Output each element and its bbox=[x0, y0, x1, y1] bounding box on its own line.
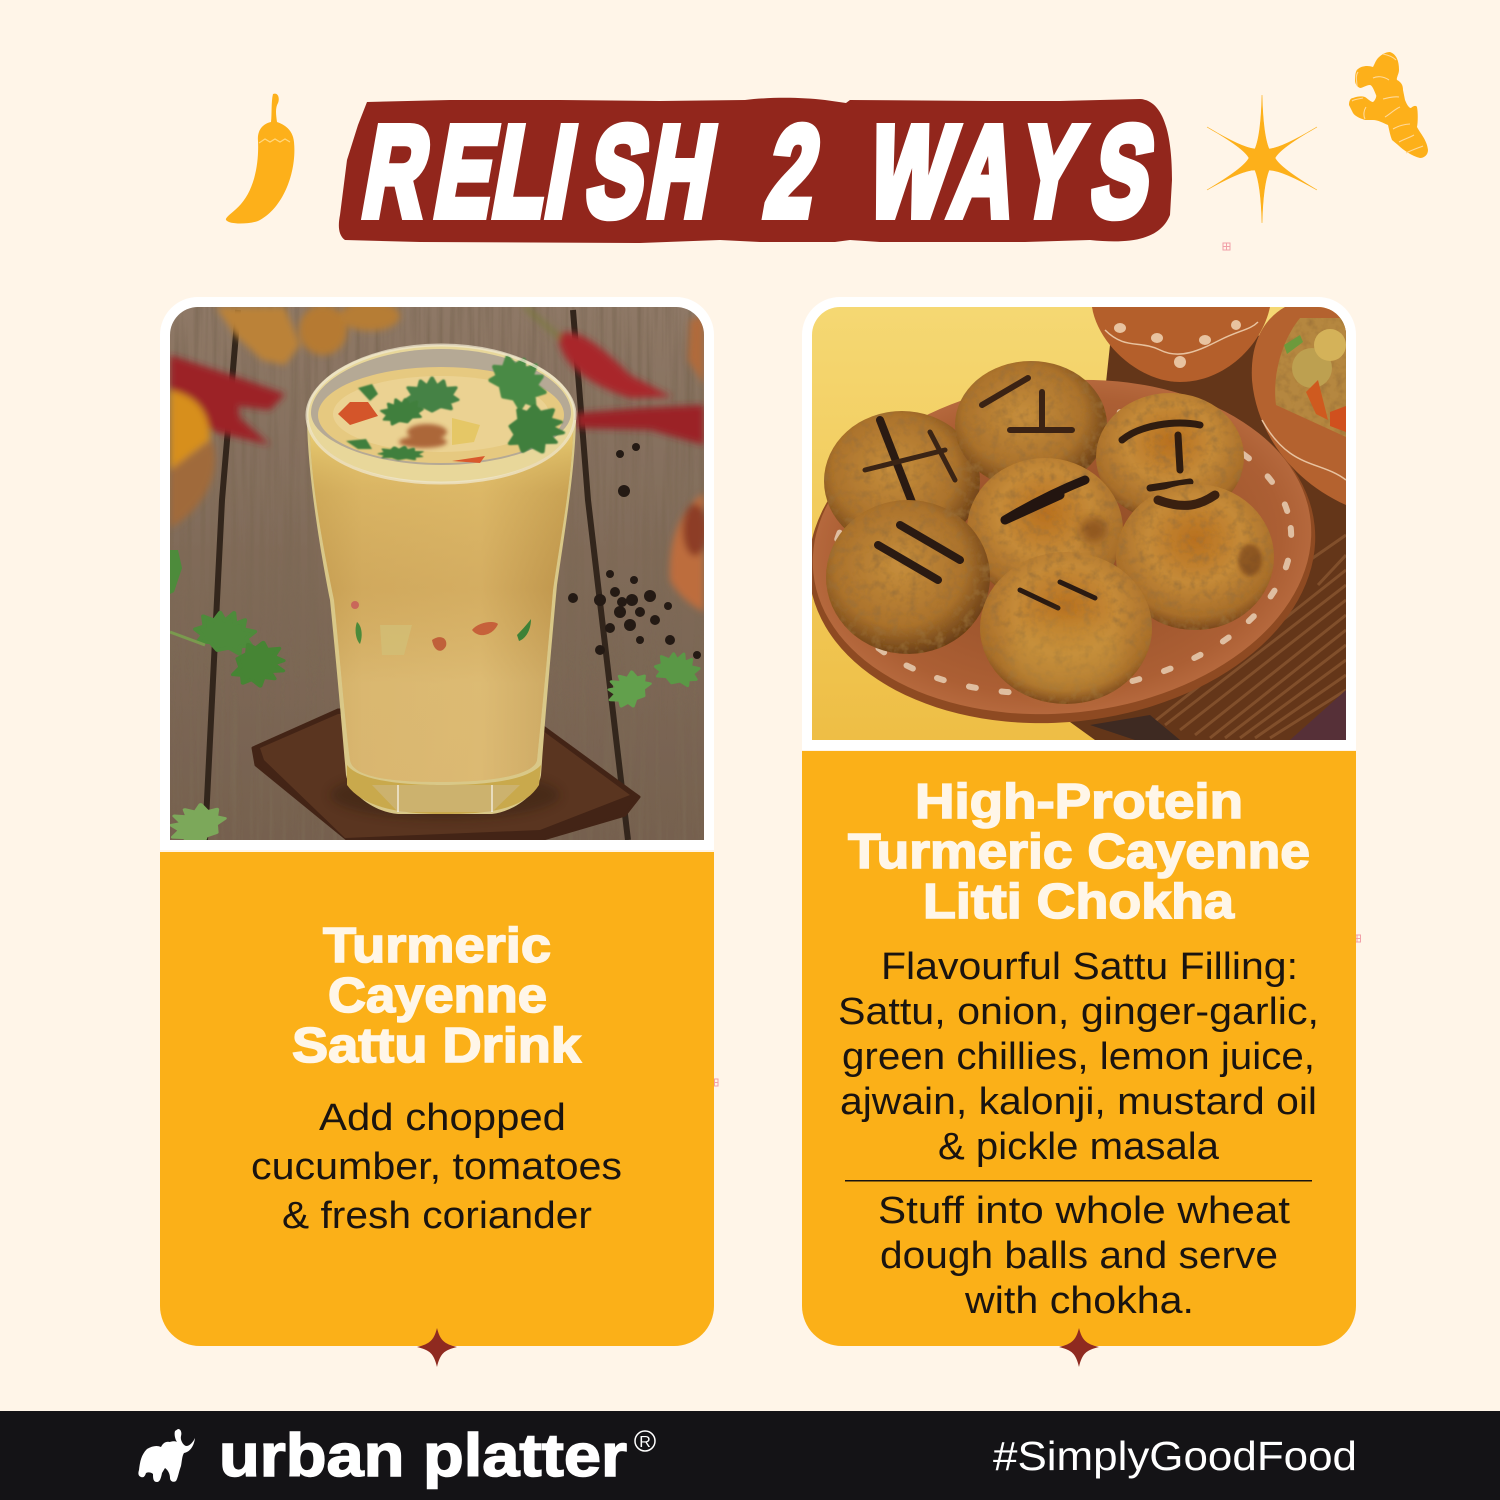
text: sattu drink description: & fresh coriander bbox=[282, 1195, 592, 1237]
text: filling ingredients: ajwain, kalonji, mustard oil bbox=[840, 1081, 1317, 1123]
text card: litti chokha bbox=[802, 751, 1356, 1346]
marker bbox=[1223, 243, 1230, 250]
text: filling ingredients: Sattu, onion, ginger-garlic, bbox=[838, 991, 1319, 1033]
text: sattu drink description: Add chopped bbox=[319, 1097, 566, 1139]
marker bbox=[711, 1079, 718, 1086]
marker bbox=[1354, 935, 1360, 942]
heading: sattu drink: Sattu Drink bbox=[292, 1019, 582, 1073]
bowl right bbox=[1252, 307, 1346, 505]
heading: litti chokha: Litti Chokha bbox=[923, 875, 1235, 929]
litti balls bbox=[824, 361, 1274, 704]
icon: sparkle bbox=[1207, 95, 1317, 223]
leaves bbox=[160, 550, 704, 850]
text: stuffing instructions bbox=[878, 1190, 1290, 1322]
heading: litti chokha bbox=[848, 775, 1310, 929]
blurred props bbox=[170, 301, 707, 612]
spice bbox=[399, 424, 447, 448]
chunks on surface bbox=[338, 402, 378, 425]
text: sattu drink description: cucumber, tomatoes bbox=[251, 1146, 622, 1188]
heading: sattu drink bbox=[292, 919, 582, 1073]
icon: ginger bbox=[1349, 52, 1428, 158]
coriander bbox=[346, 346, 568, 461]
plate bbox=[812, 435, 1316, 724]
text: filling ingredients: Flavourful Sattu Filling: bbox=[881, 946, 1298, 988]
peppercorns bbox=[568, 443, 701, 659]
bowl top bbox=[1092, 307, 1270, 382]
icon: chilli bbox=[226, 94, 294, 224]
text card: sattu drink bbox=[160, 852, 714, 1346]
heading: sattu drink: Turmeric bbox=[323, 919, 551, 973]
icon: elephant logo bbox=[138, 1429, 195, 1482]
chunks in drink bbox=[351, 601, 531, 655]
photo: litti chokha plate bbox=[792, 307, 1346, 748]
glass base bbox=[347, 765, 541, 814]
heading: litti chokha: Turmeric Cayenne bbox=[848, 825, 1310, 879]
photo: sattu drink glass bbox=[160, 301, 707, 850]
footer bar bbox=[0, 1411, 1500, 1500]
logo wordmark: urban platter bbox=[219, 1422, 627, 1489]
glass rim + surface bbox=[307, 345, 575, 483]
title: RELISH 2 WAYS bbox=[354, 101, 1164, 244]
text: filling ingredients: & pickle masala bbox=[938, 1126, 1220, 1168]
glass shadow bbox=[332, 781, 558, 820]
icon: red star bbox=[1059, 1328, 1099, 1367]
icon: red star bbox=[417, 1328, 457, 1367]
heading: litti chokha: High-Protein bbox=[915, 775, 1243, 829]
text: filling ingredients: green chillies, lemon juice, bbox=[842, 1036, 1315, 1078]
text: filling ingredients bbox=[838, 946, 1319, 1168]
registered mark: R bbox=[639, 1434, 651, 1451]
registered mark bbox=[635, 1431, 655, 1451]
heading: sattu drink: Cayenne bbox=[328, 969, 547, 1023]
hashtag: #SimplyGoodFood bbox=[993, 1433, 1357, 1479]
text: stuffing instructions: with chokha. bbox=[964, 1280, 1194, 1322]
glass body bbox=[307, 420, 576, 814]
text: stuffing instructions: Stuff into whole wheat bbox=[878, 1190, 1290, 1232]
text: stuffing instructions: dough balls and serve bbox=[880, 1235, 1278, 1277]
photo frame bbox=[160, 297, 714, 850]
panel: litti chokha bbox=[792, 297, 1356, 1367]
text: sattu drink description bbox=[251, 1097, 622, 1237]
coaster bbox=[253, 710, 639, 840]
photo frame bbox=[802, 297, 1356, 750]
panel: sattu drink bbox=[160, 297, 714, 1367]
